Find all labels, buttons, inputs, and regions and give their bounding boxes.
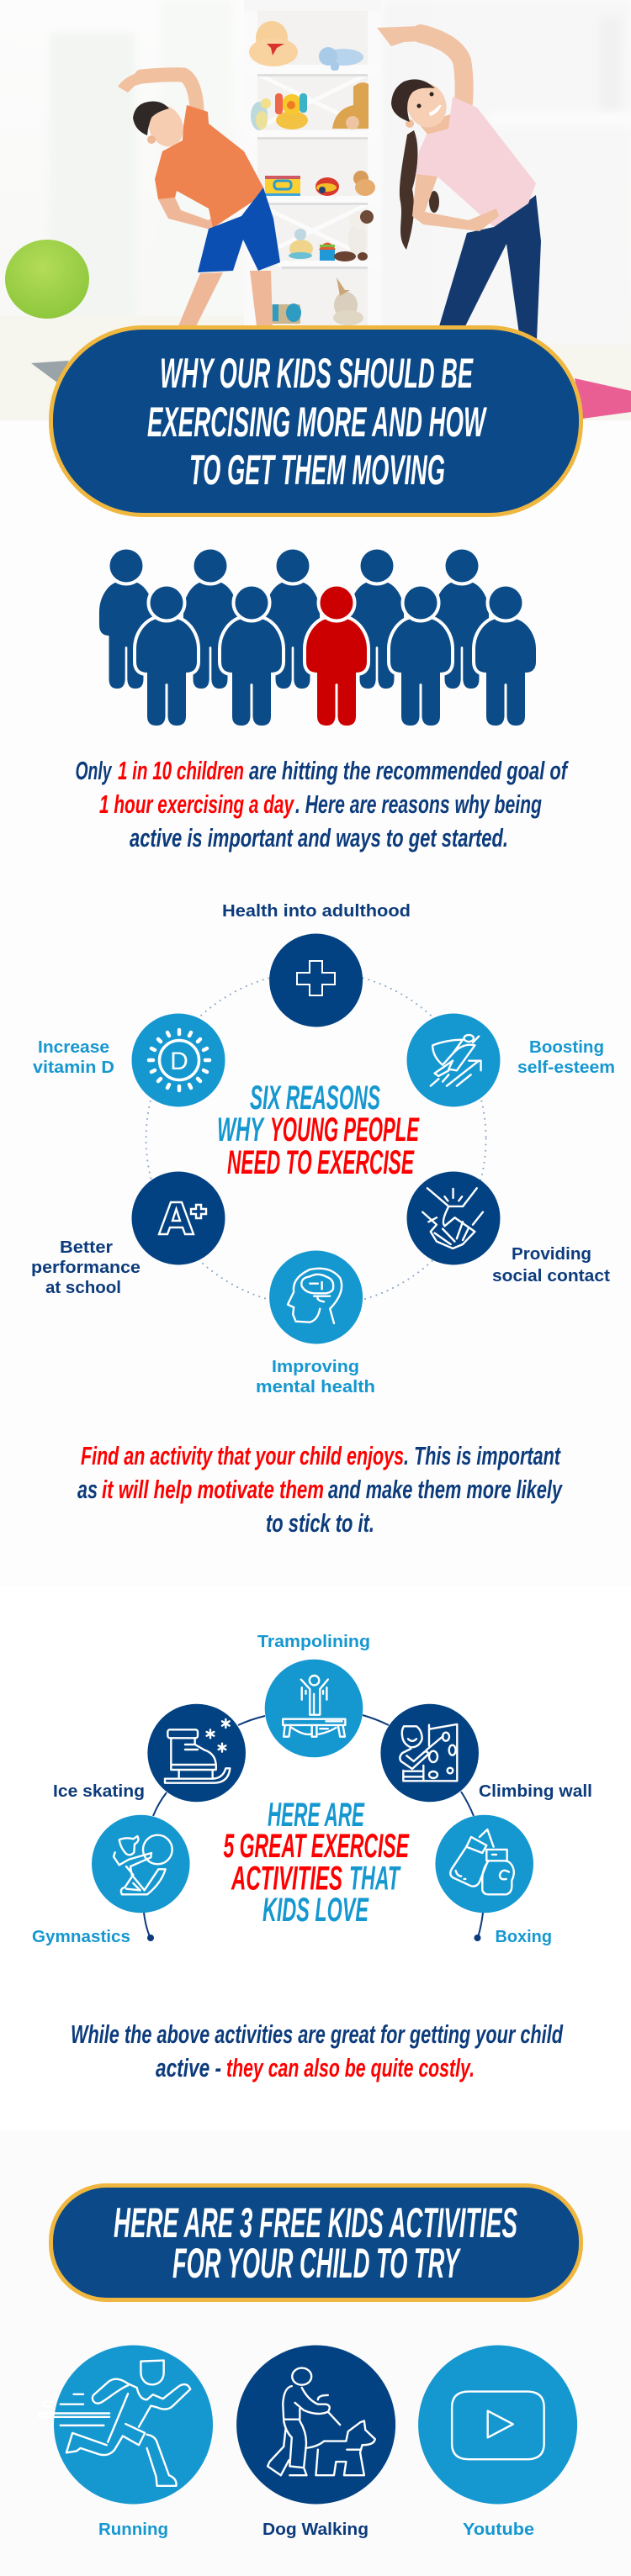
heading: six reasons: SIX REASONS	[250, 1079, 380, 1116]
advice text: find an activity: as	[77, 1475, 98, 1504]
boy	[118, 71, 280, 326]
reason: health into adulthood: Health into adulthood	[222, 902, 411, 921]
title banner	[50, 328, 581, 515]
reason: improving mental health	[256, 1251, 375, 1396]
activity: boxing: Boxing	[495, 1928, 552, 1946]
toy shelf	[244, 0, 381, 325]
free activity: youtube: Youtube	[463, 2521, 534, 2539]
reason: increase vitamin D: vitamin D	[33, 1058, 114, 1077]
free activity: running: Running	[98, 2521, 168, 2539]
free activity: dog walking	[236, 2346, 395, 2539]
advice text: find an activity: it will help motivate them	[102, 1475, 324, 1504]
heading: five activities: KIDS LOVE	[262, 1892, 369, 1929]
advice text: find an activity: Find an activity that your child enjoys	[81, 1441, 404, 1470]
intro text: Only	[76, 756, 113, 785]
reason: providing social contact: social contact	[492, 1267, 610, 1285]
intro text: 1 in 10 children	[118, 756, 244, 785]
heading: five activities: 5 GREAT EXERCISE	[224, 1828, 410, 1865]
heading: six reasons: YOUNG PEOPLE	[270, 1111, 420, 1148]
exercise ball	[5, 240, 89, 319]
pictogram: 1 in 10 children	[99, 550, 536, 726]
reason: better performance at school: Better	[60, 1238, 113, 1257]
advice text: find an activity	[77, 1441, 563, 1538]
advice text: find an activity: . This is important	[404, 1441, 561, 1470]
free activity: running	[39, 2346, 213, 2539]
reason: providing social contact	[407, 1172, 610, 1285]
reason: boosting self-esteem: self-esteem	[517, 1058, 615, 1077]
reason: health into adulthood	[222, 902, 411, 1027]
reason: boosting self-esteem: Boosting	[529, 1038, 604, 1057]
floor	[156, 316, 628, 348]
activity: gymnastics	[32, 1815, 190, 1946]
cost note text: active -	[156, 2053, 221, 2082]
heading: six reasons: WHY	[217, 1111, 265, 1148]
reason: better performance at school: performance	[31, 1259, 141, 1277]
reason: increase vitamin D: D	[170, 1048, 188, 1075]
advice text: find an activity: to stick to it.	[266, 1508, 374, 1538]
exercise mats	[31, 361, 69, 383]
heading: five activities: ACTIVITIES	[231, 1860, 342, 1897]
activity: climbing wall: Climbing wall	[479, 1782, 592, 1801]
reason: increase vitamin D	[33, 1014, 225, 1106]
activity: boxing	[435, 1815, 552, 1946]
activity: ice skating: Ice skating	[53, 1782, 145, 1801]
girl	[377, 26, 541, 340]
intro text	[76, 756, 569, 853]
reason: better performance at school	[31, 1172, 225, 1297]
activity: gymnastics: Gymnastics	[32, 1928, 130, 1946]
reason: improving mental health: mental health	[256, 1378, 375, 1396]
reason: better performance at school: at school	[45, 1279, 121, 1297]
reason: improving mental health: Improving	[272, 1358, 359, 1376]
heading: five activities	[224, 1797, 410, 1929]
free activities banner	[50, 2186, 581, 2300]
diagram: five activities	[32, 1633, 592, 1946]
reason: increase vitamin D: Increase	[38, 1038, 109, 1057]
heading: five activities: THAT	[349, 1860, 401, 1897]
heading: six reasons: NEED TO EXERCISE	[227, 1144, 415, 1181]
toys	[256, 21, 288, 42]
diagram: six reasons	[31, 902, 615, 1396]
cost note text	[71, 2019, 564, 2082]
cost note text: they can also be quite costly.	[226, 2053, 475, 2082]
hero photo: children stretching	[0, 0, 631, 420]
reason: boosting self-esteem	[407, 1014, 615, 1106]
free activity: youtube	[418, 2346, 577, 2539]
reason: providing social contact: Providing	[512, 1245, 591, 1264]
free activity: dog walking: Dog Walking	[262, 2521, 369, 2539]
intro text: 1 hour exercising a day	[99, 789, 294, 819]
activity: climbing wall	[380, 1704, 592, 1802]
activity: trampolining	[257, 1633, 370, 1757]
heading: six reasons	[217, 1079, 420, 1181]
activity: trampolining: Trampolining	[257, 1633, 370, 1651]
heading: five activities: HERE ARE	[268, 1797, 365, 1834]
activity: ice skating	[53, 1704, 246, 1802]
